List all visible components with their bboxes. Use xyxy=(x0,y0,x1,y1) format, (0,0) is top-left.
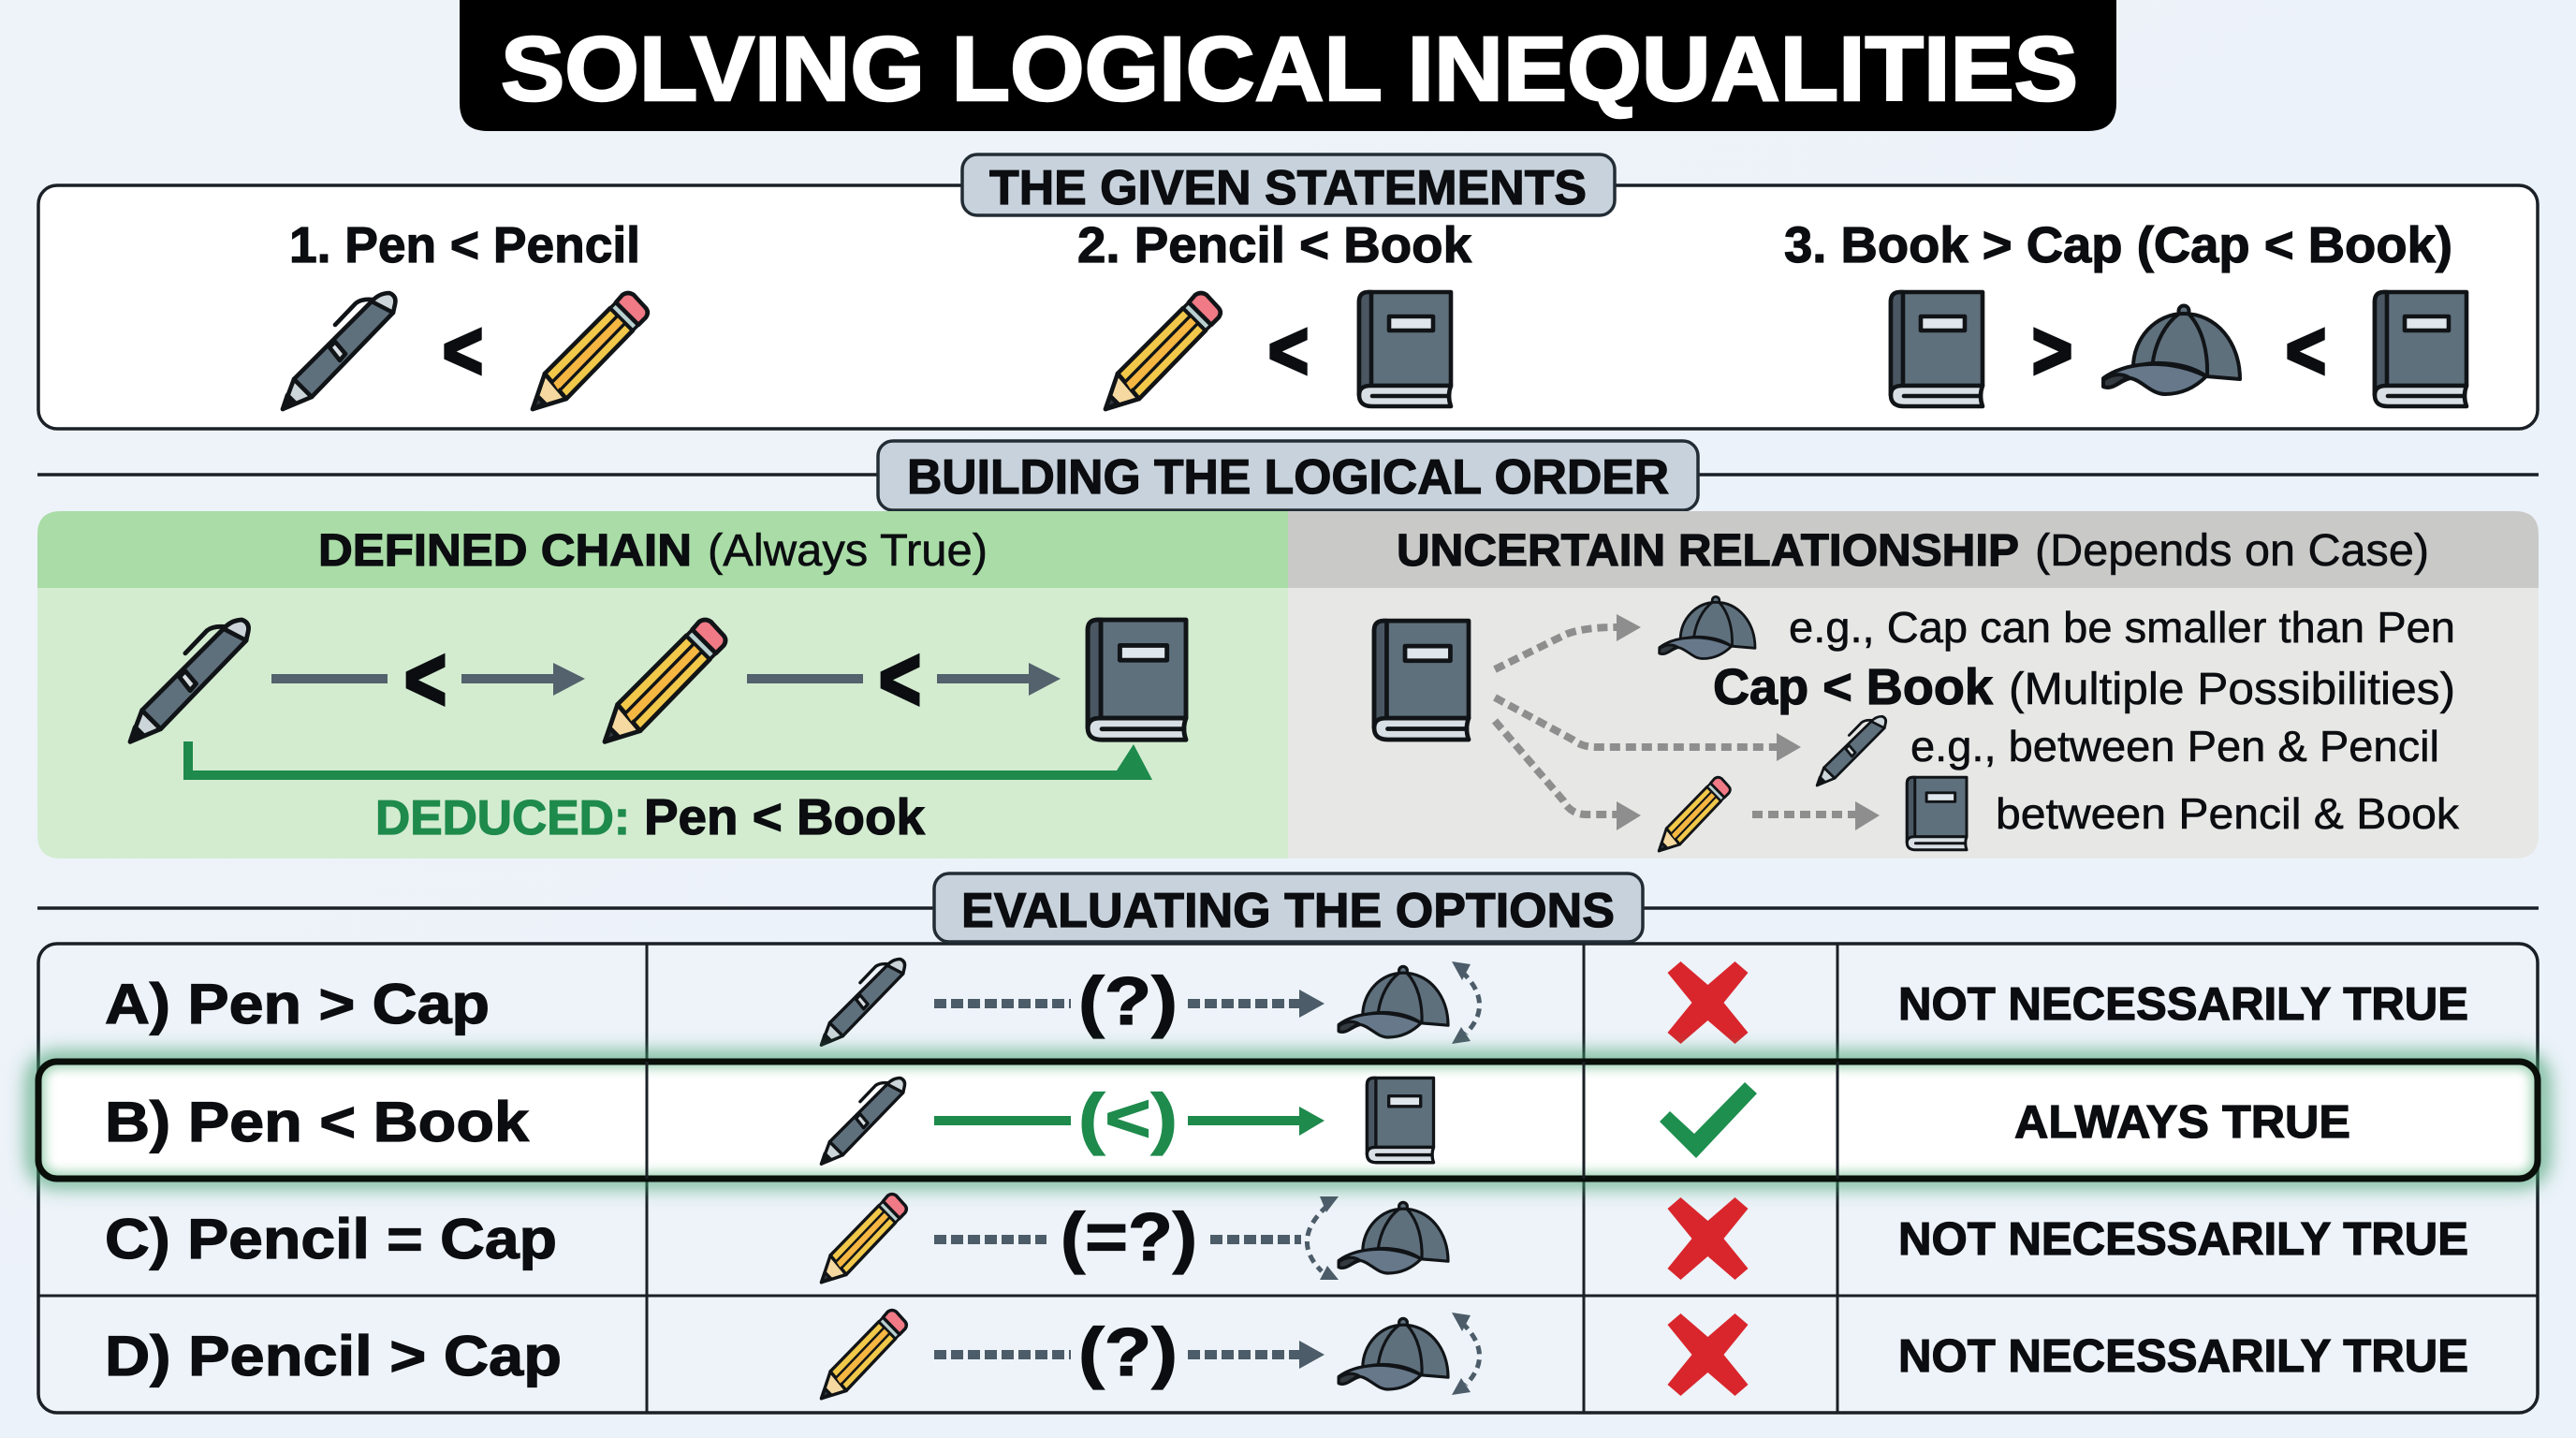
icon: book xyxy=(1907,777,1967,850)
row C xyxy=(105,1195,2468,1283)
row B highlighted: ALWAYS TRUE xyxy=(2014,1097,2350,1148)
statement 3: < xyxy=(2286,306,2326,396)
dashed arrow to book xyxy=(1752,801,1880,830)
row A: NOT NECESSARILY TRUE xyxy=(1898,979,2468,1030)
text: cap smaller than pen: e.g., Cap can be smaller than Pen xyxy=(1789,603,2455,652)
statement 2 xyxy=(1077,217,1472,409)
row D: D) Pencil > Cap xyxy=(105,1325,562,1387)
panel: defined chain xyxy=(37,511,1288,858)
arrow: pen less than pencil xyxy=(271,629,585,729)
text: between pen and pencil: e.g., between Pen & Pencil xyxy=(1910,722,2439,770)
deduced conclusion: Pen < Book xyxy=(644,789,926,845)
statement 3: > xyxy=(2032,306,2072,396)
icon: book xyxy=(1374,621,1469,740)
row B highlighted: B) Pen < Book xyxy=(105,1091,530,1153)
row A: (?) xyxy=(1078,964,1178,1039)
uncertain relationship header: UNCERTAIN RELATIONSHIP xyxy=(1397,526,2019,576)
uncertain relationship header: (Depends on Case) xyxy=(2035,526,2429,576)
arrow: pencil less than book xyxy=(747,629,1061,729)
statement 2: < xyxy=(1268,306,1309,396)
arrow: pencil less than book: < xyxy=(879,629,921,729)
statement 1 xyxy=(283,217,648,409)
statement 3: 3. Book > Cap (Cap < Book) xyxy=(1784,217,2452,273)
statement 3 xyxy=(1784,217,2466,406)
icon: cap xyxy=(1660,596,1755,659)
heading: the given statements: THE GIVEN STATEMENTS xyxy=(989,161,1587,215)
dashed arrow to pen xyxy=(1495,697,1801,761)
row B highlighted: (<) xyxy=(1078,1081,1178,1156)
title banner: SOLVING LOGICAL INEQUALITIES xyxy=(501,18,2078,120)
row D: NOT NECESSARILY TRUE xyxy=(1898,1331,2468,1382)
row D: (?) xyxy=(1078,1315,1178,1390)
text: between pencil and book: between Pencil & Book xyxy=(1996,789,2460,838)
panel: uncertain relationship xyxy=(1288,511,2539,858)
text: cap less than book xyxy=(1713,659,2455,715)
deduced conclusion: DEDUCED: xyxy=(375,791,630,845)
row B highlighted xyxy=(36,1061,2540,1179)
dashed arrow to cap xyxy=(1495,614,1641,669)
icon: pen xyxy=(130,620,249,741)
defined chain header xyxy=(37,511,1288,588)
deduced conclusion xyxy=(375,789,926,845)
statement 1: < xyxy=(443,306,483,396)
row D xyxy=(105,1311,2468,1399)
heading: evaluating the options: EVALUATING THE OPTIONS xyxy=(961,884,1615,938)
dashed arrow to pencil xyxy=(1495,721,1641,830)
icon: pencil xyxy=(605,620,725,741)
table: evaluating the options xyxy=(36,873,2540,1413)
icon: pencil xyxy=(1659,777,1730,851)
row C: NOT NECESSARILY TRUE xyxy=(1898,1214,2468,1265)
defined chain header: DEFINED CHAIN xyxy=(318,526,692,576)
text: cap less than book: (Multiple Possibilities) xyxy=(2009,665,2455,714)
icon: book xyxy=(1088,620,1186,740)
row A: A) Pen > Cap xyxy=(105,973,490,1035)
statement 1: 1. Pen < Pencil xyxy=(289,217,640,273)
arrow: pen less than pencil: < xyxy=(404,629,446,729)
statement 2: 2. Pencil < Book xyxy=(1077,217,1472,273)
heading: building the logical order: BUILDING THE LOGICAL ORDER xyxy=(907,450,1669,505)
row A xyxy=(105,959,2468,1045)
panel: given statements xyxy=(38,154,2538,429)
defined chain header: (Always True) xyxy=(708,526,988,576)
deduction bracket arrow xyxy=(183,741,1152,780)
uncertain relationship header xyxy=(1288,511,2539,588)
icon: pen xyxy=(1817,716,1886,785)
row C: C) Pencil = Cap xyxy=(105,1208,557,1270)
text: cap less than book: Cap < Book xyxy=(1713,659,1994,715)
row C: (=?) xyxy=(1061,1200,1197,1275)
